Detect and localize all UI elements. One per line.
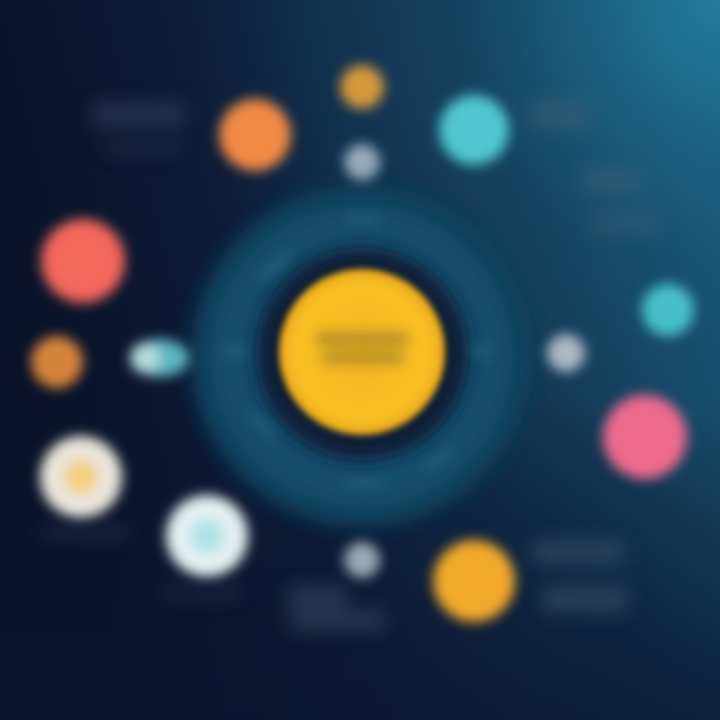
red circle left [41, 219, 125, 303]
blurred text block top-left [92, 102, 186, 154]
small orange circle left [31, 336, 83, 388]
pink circle right [603, 395, 687, 479]
amber circle bottom [433, 540, 515, 622]
cyan circle top-right [439, 95, 509, 165]
dark inner ring [256, 248, 468, 460]
cream circle lower left [40, 436, 122, 518]
blurred text block lower-left [40, 526, 240, 598]
pale cyan circle lower left [166, 495, 248, 577]
teal white node left [130, 339, 189, 377]
blurred text block bottom-right [532, 540, 628, 612]
grey node right [547, 334, 585, 372]
blurred text block top-right [530, 100, 660, 236]
blurred text block bottom-center [288, 586, 386, 630]
central yellow circle [279, 269, 445, 435]
ring labels [222, 215, 494, 488]
central label [316, 332, 408, 364]
small grey node bottom [344, 542, 380, 578]
orange circle top-left [219, 99, 291, 171]
teal circle right [642, 284, 694, 336]
small amber circle top [340, 65, 384, 109]
small grey node top [344, 144, 380, 180]
central ring [190, 184, 534, 528]
